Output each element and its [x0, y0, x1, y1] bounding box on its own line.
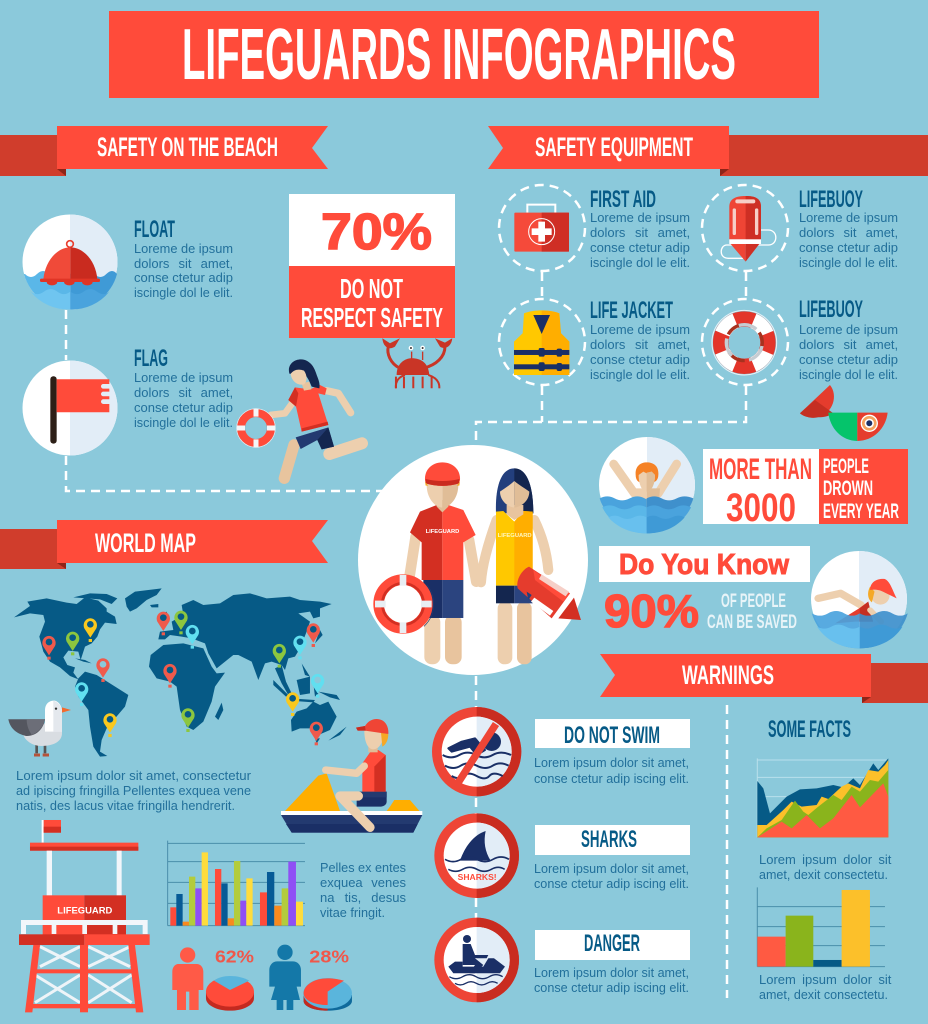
stat: male 62 percent: [172, 947, 254, 1011]
text: lifebuoy bottom: [799, 322, 898, 382]
illustration: jet ski rider: [281, 719, 422, 833]
heading: do not swim: [535, 719, 690, 749]
callout: 90 percent: CAN BE SAVED: [707, 612, 797, 633]
text: lifebuoy top: iscingle dol le elit.: [799, 255, 898, 270]
callout: do you know: Do You Know: [619, 549, 789, 581]
text: chart note: exquea venes: [320, 875, 406, 890]
callout: more than 3000: MORE THAN: [709, 453, 812, 486]
area chart: [757, 758, 888, 837]
text: first aid: dolors sit amet,: [590, 225, 690, 240]
sign: sharks: [434, 813, 519, 898]
callout: more than 3000: PEOPLE: [823, 455, 869, 478]
heading: float: FLOAT: [134, 216, 175, 243]
figure: male lifeguard: [409, 462, 476, 664]
text: float: dolors sit amet,: [134, 256, 233, 271]
text: flag: [134, 370, 233, 430]
text: bar chart note: amet, dexit consectetu.: [759, 987, 888, 1002]
text: float: Loreme de ipsum: [134, 241, 233, 256]
sign: do not swim: [432, 707, 521, 796]
text: sharks: [534, 861, 689, 891]
text: map description: Lorem ipsum dolor sit amet, consectetur: [16, 768, 252, 783]
text: lifebuoy bottom: dolors sit amet,: [799, 337, 898, 352]
icon: drowning swimmer: [599, 437, 695, 533]
text: area chart note: [759, 852, 892, 882]
callout: 90 percent: OF PEOPLE: [721, 591, 786, 612]
heading: danger: DANGER: [584, 930, 640, 957]
section banner: warnings: [600, 654, 928, 703]
callout: more than 3000: [703, 449, 908, 530]
bar chart: grouped bars: [168, 841, 305, 926]
sign: danger: [434, 918, 519, 1002]
figure: male lifeguard: LIFEGUARD: [426, 529, 459, 535]
text: do not swim: Lorem ipsum dolor sit amet,: [534, 755, 689, 770]
icon: life ring: [702, 299, 788, 385]
text: sharks: conse ctetur adip iscing elit.: [534, 876, 689, 891]
illustration: lifeguard tower: [19, 820, 150, 1012]
section banner: safety equipment: SAFETY EQUIPMENT: [535, 132, 693, 162]
heading: sharks: SHARKS: [581, 826, 637, 853]
map pins: [42, 611, 324, 745]
stat: female 28 percent: [269, 945, 352, 1011]
text: chart note: vitae fringit.: [320, 905, 385, 920]
text: first aid: conse ctetur adip: [590, 240, 690, 255]
heading: sharks: [535, 825, 690, 855]
callout: 70 percent: [289, 194, 455, 338]
icon: first aid: [499, 185, 585, 271]
heading: life jacket: LIFE JACKET: [590, 297, 673, 324]
bar chart: four bars: [757, 887, 885, 967]
text: flag: dolors sit amet,: [134, 385, 233, 400]
callout: more than 3000: DROWN: [823, 477, 873, 500]
callout: 70 percent: 70%: [321, 203, 432, 260]
text: life jacket: Loreme de ipsum: [590, 322, 690, 337]
world map: [14, 588, 347, 757]
icon: seagull: [8, 701, 71, 755]
text: bar chart note: [759, 972, 892, 1002]
section banner: world map: [0, 520, 328, 569]
text: life jacket: [590, 322, 690, 382]
heading: lifebuoy top: LIFEBUOY: [799, 186, 863, 213]
icon: float: [22, 214, 118, 310]
icon: flag: [22, 360, 118, 456]
text: life jacket: dolors sit amet,: [590, 337, 690, 352]
text: map description: [16, 768, 252, 813]
sign: sharks: SHARKS!: [458, 873, 497, 882]
section banner: safety on the beach: [0, 126, 328, 176]
connector dashes: [66, 272, 746, 998]
text: lifebuoy top: dolors sit amet,: [799, 225, 898, 240]
text: sharks: Lorem ipsum dolor sit amet,: [534, 861, 689, 876]
text: map description: ad ipiscing fringilla Pellentes exquea vene: [16, 783, 251, 798]
figure: female lifeguard: LIFEGUARD: [498, 533, 532, 539]
text: float: [134, 241, 233, 300]
stat: male 62 percent: 62%: [215, 947, 254, 967]
callout: 90 percent: 90%: [604, 585, 699, 637]
icon: fish and fin: [800, 385, 888, 441]
text: map description: natis, des lacus vitae fringilla hendrerit.: [16, 798, 235, 813]
text: float: iscingle dol le elit.: [134, 285, 233, 300]
icon: life jacket: [499, 299, 585, 385]
text: flag: conse ctetur adip: [134, 400, 233, 415]
callout: 70 percent: RESPECT SAFETY: [301, 302, 443, 333]
illustration: running lifeguard: [237, 359, 362, 478]
text: float: conse ctetur adip: [134, 270, 233, 285]
section banner: safety equipment: [488, 126, 928, 176]
text: lifebuoy top: conse ctetur adip: [799, 240, 898, 255]
icon: rescue can held by female: [517, 567, 581, 620]
text: chart note: [320, 860, 406, 920]
callout: 70 percent: DO NOT: [340, 273, 403, 304]
text: do not swim: [534, 755, 689, 786]
section banner: world map: WORLD MAP: [95, 528, 196, 558]
map: americas and greenland: [14, 588, 162, 757]
text: flag: Loreme de ipsum: [134, 370, 233, 385]
heading: first aid: FIRST AID: [590, 186, 656, 213]
callout: 90 percent: [604, 585, 797, 637]
heading: some facts: SOME FACTS: [768, 716, 851, 743]
icon: crab: [382, 338, 452, 388]
map: eurasia, africa and oceania: [149, 593, 347, 743]
text: lifebuoy bottom: iscingle dol le elit.: [799, 367, 898, 382]
text: lifebuoy top: Loreme de ipsum: [799, 210, 898, 225]
heading: danger: [535, 930, 690, 960]
text: first aid: Loreme de ipsum: [590, 210, 690, 225]
illustration: lifeguard tower: LIFEGUARD: [57, 905, 113, 915]
text: lifebuoy bottom: Loreme de ipsum: [799, 322, 898, 337]
text: do not swim: conse ctetur adip iscing elit.: [534, 771, 689, 786]
icon: swimmer: [811, 551, 908, 648]
text: life jacket: conse ctetur adip: [590, 352, 690, 367]
text: danger: Lorem ipsum dolor sit amet,: [534, 965, 689, 980]
section banner: safety on the beach: SAFETY ON THE BEACH: [97, 132, 278, 162]
text: danger: conse ctetur adip iscing elit.: [534, 980, 689, 995]
text: life jacket: iscingle dol le elit.: [590, 367, 690, 382]
text: chart note: Pelles ex entes: [320, 860, 406, 875]
text: lifebuoy top: [799, 210, 898, 270]
text: chart note: na tis, desus: [320, 890, 406, 905]
heading: do not swim: DO NOT SWIM: [564, 722, 660, 749]
text: flag: iscingle dol le elit.: [134, 415, 233, 430]
text: danger: [534, 965, 689, 995]
text: bar chart note: Lorem ipsum dolor sit: [759, 972, 892, 987]
illustration: lifeguard couple: [358, 445, 588, 675]
heading: lifebuoy bottom: LIFEBUOY: [799, 296, 863, 323]
stat: female 28 percent: 28%: [309, 947, 349, 967]
section banner: warnings: WARNINGS: [682, 660, 774, 690]
heading: flag: FLAG: [134, 345, 168, 372]
icon: rescue can: [702, 185, 788, 271]
text: lifebuoy bottom: conse ctetur adip: [799, 352, 898, 367]
icon: ring held by male: [372, 573, 434, 635]
text: area chart note: Lorem ipsum dolor sit: [759, 852, 892, 867]
text: first aid: [590, 210, 690, 270]
figure: female lifeguard: [481, 468, 548, 664]
text: first aid: iscingle dol le elit.: [590, 255, 690, 270]
text: area chart note: amet, dexit consectetu.: [759, 867, 888, 882]
callout: more than 3000: 3000: [726, 486, 796, 530]
